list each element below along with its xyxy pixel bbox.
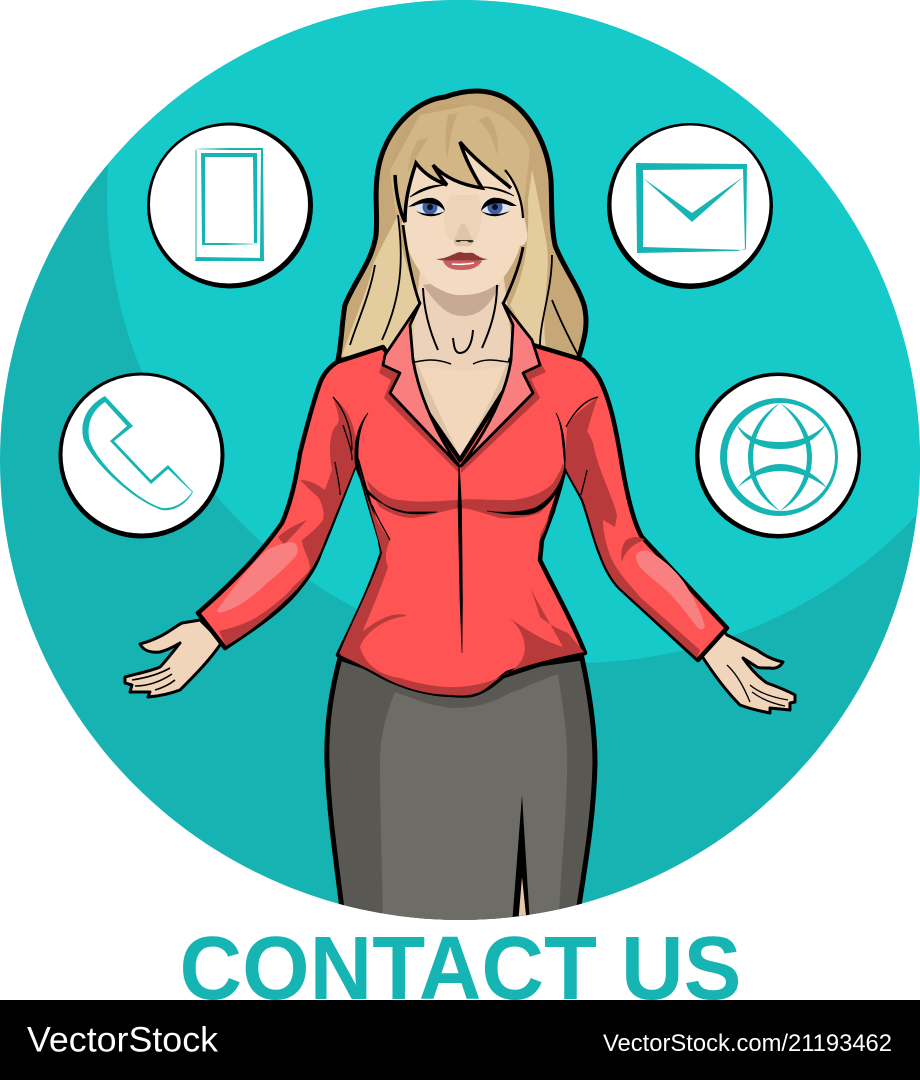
lips <box>436 252 488 270</box>
right hand <box>700 630 795 713</box>
icon: mobile phone <box>147 122 313 288</box>
blouse shading <box>219 362 700 696</box>
title: CONTACT US <box>180 919 742 1019</box>
collar <box>383 303 459 466</box>
sleeve highlights <box>217 542 298 613</box>
blouse <box>198 303 727 696</box>
hair back <box>338 91 586 360</box>
footer brand: VectorStock <box>27 1020 219 1060</box>
icon: envelope <box>607 123 773 289</box>
hair fringe <box>390 105 530 304</box>
footer bar <box>0 1000 920 1080</box>
footer image id: VectorStock.com/21193462 <box>603 1030 892 1057</box>
face <box>402 140 527 295</box>
neck <box>412 270 512 460</box>
blouse seams <box>458 458 462 653</box>
icon: telephone handset <box>58 372 224 538</box>
skirt <box>327 658 595 925</box>
icon: globe <box>695 372 861 538</box>
right eye <box>480 187 517 216</box>
left eye <box>408 185 447 216</box>
left hand <box>125 620 222 697</box>
figure: woman <box>125 91 795 925</box>
